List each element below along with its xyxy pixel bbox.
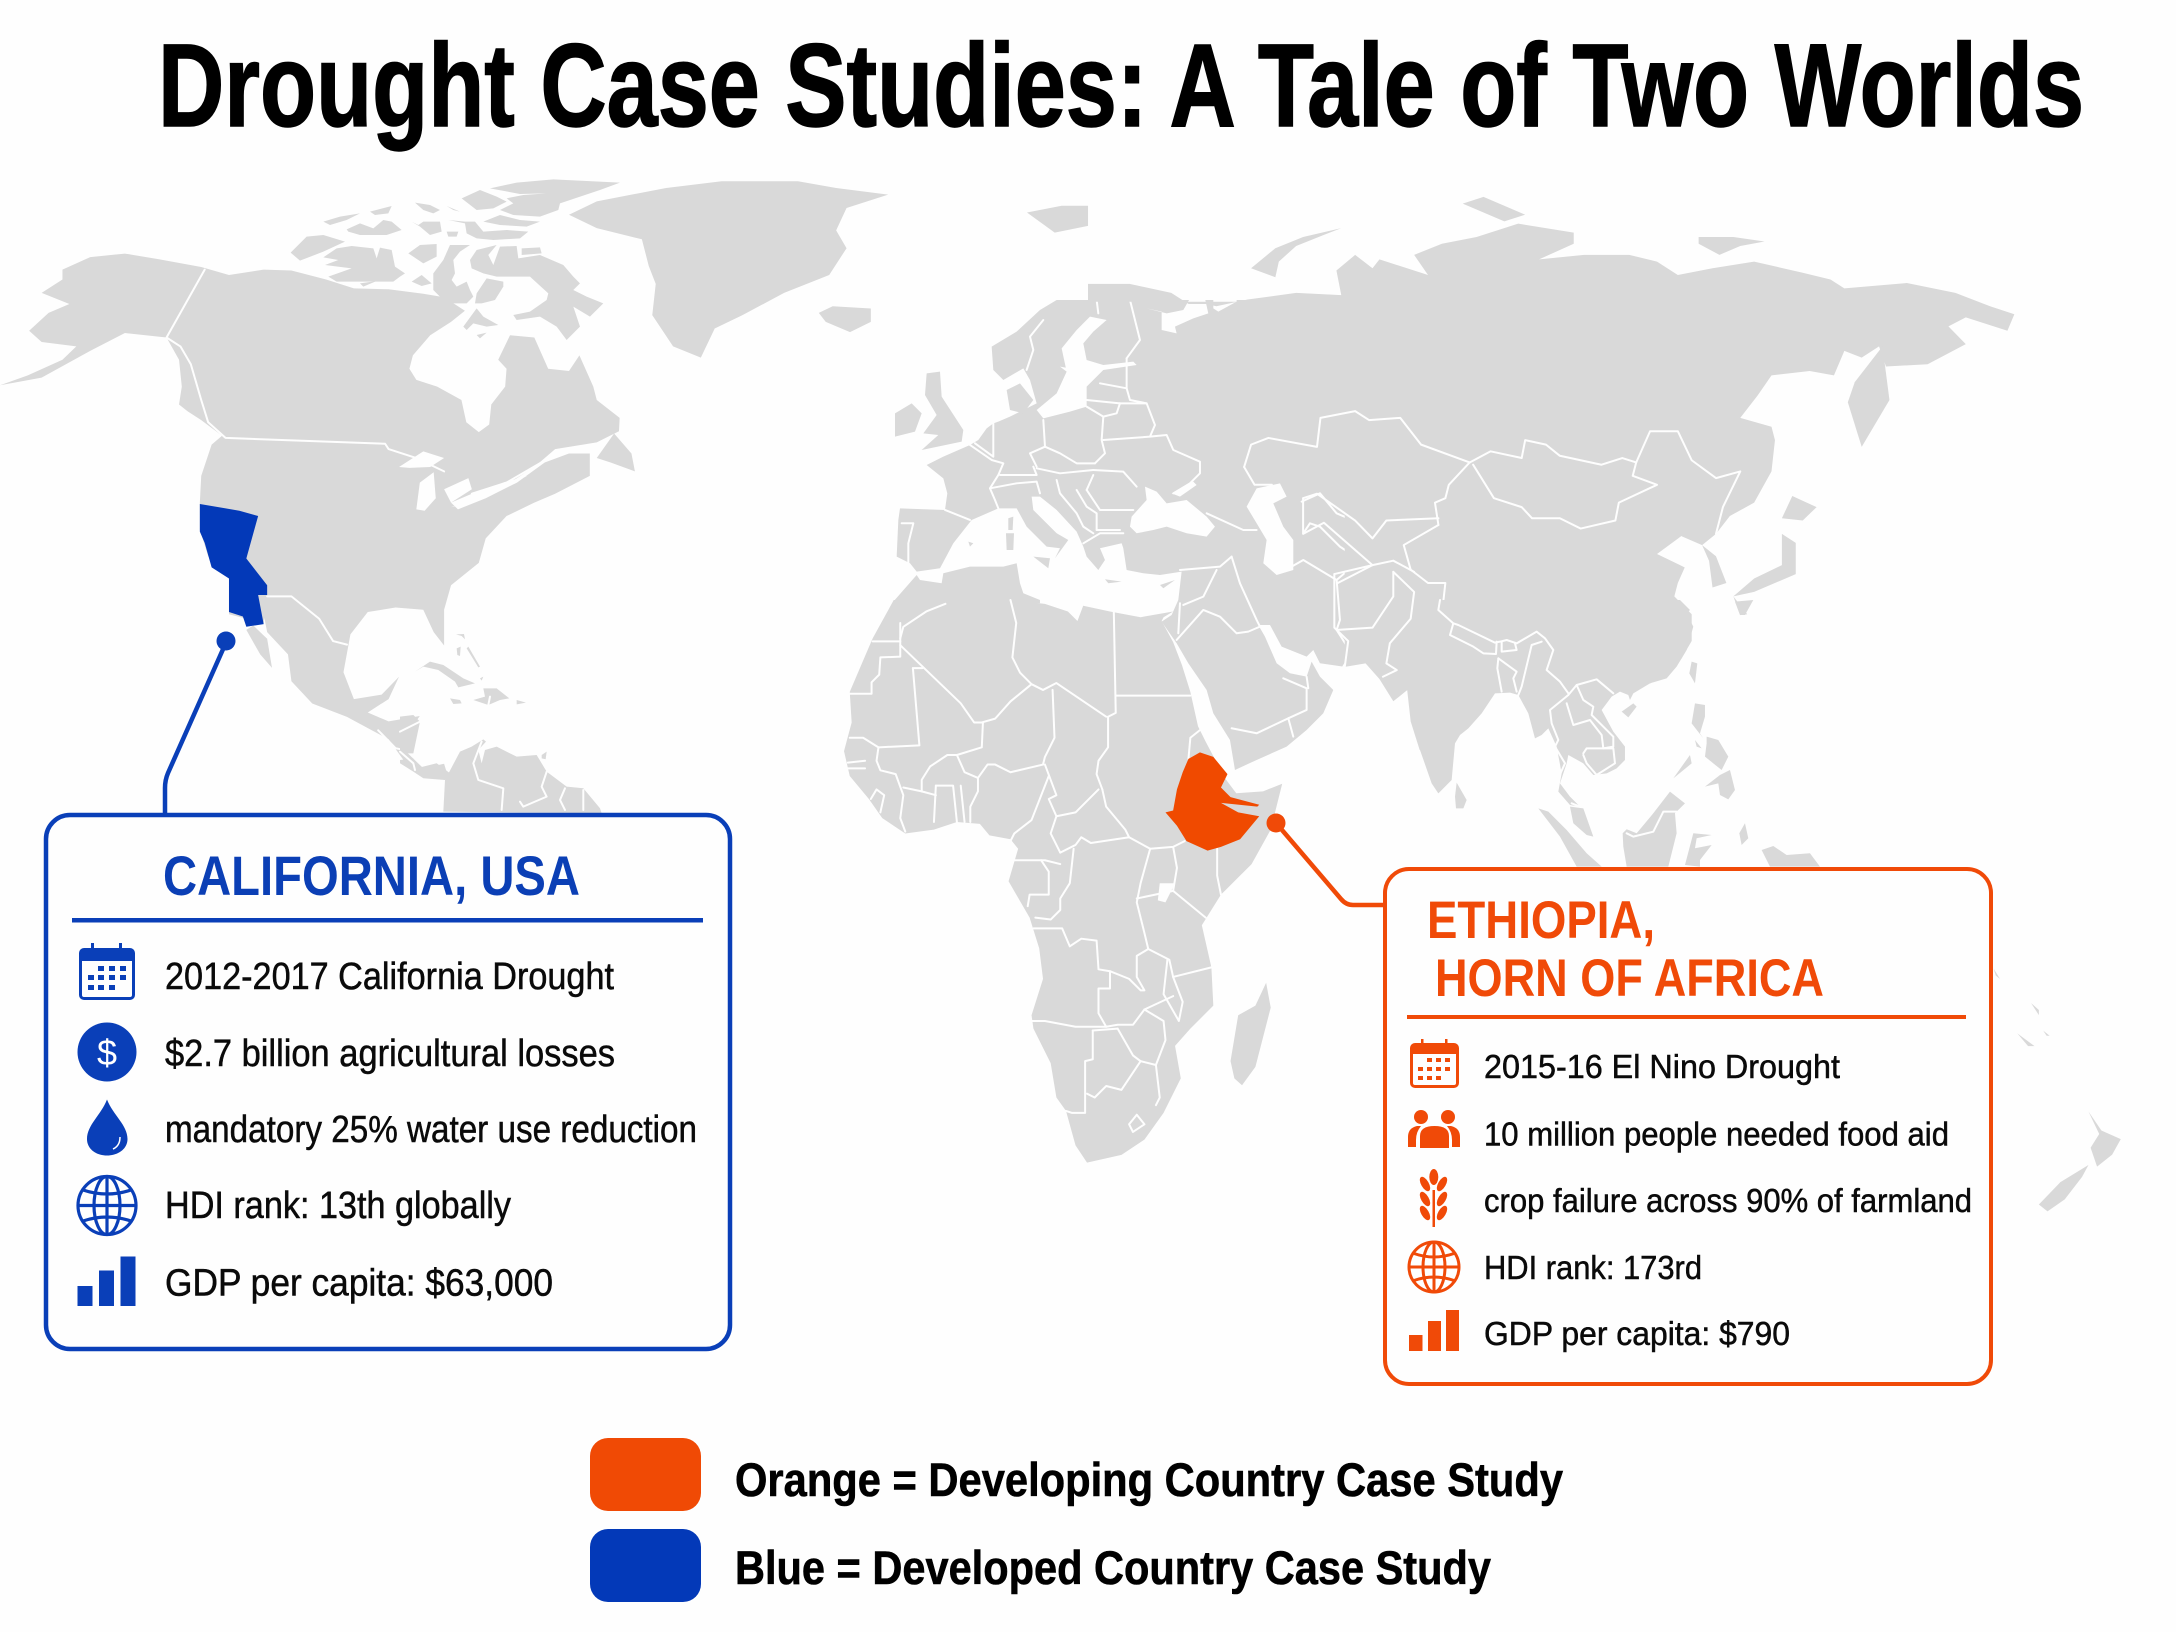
icon: globe [1409,1242,1459,1292]
California highlight [200,504,267,627]
icon: bars [1409,1310,1459,1351]
row text: date: 2015-16 El Nino Drought [1484,1048,1840,1085]
heading: Ethiopia line 1: ETHIOPIA, [1427,891,1655,950]
legend [590,1438,1563,1602]
row text: water use: mandatory 25% water use reduction [165,1109,697,1151]
icon: calendar [1410,1039,1459,1088]
icon: dollar [78,1022,136,1082]
panel: California [46,815,730,1349]
row text: people: 10 million people needed food aid [1484,1116,1949,1152]
icon: globe [78,1176,136,1234]
row text: HDI: HDI rank: 173rd [1484,1249,1702,1286]
world map [0,179,2121,1211]
icon: wheat [1418,1169,1449,1227]
icon: bars [78,1256,136,1306]
legend text: blue: Blue = Developed Country Case Study [735,1541,1491,1594]
row text: crops: crop failure across 90% of farmland [1484,1182,1972,1219]
row text: HDI: HDI rank: 13th globally [165,1185,511,1227]
connector: Ethiopia [1266,814,1386,905]
icon: people [1408,1110,1460,1148]
connector: California [165,632,236,816]
row text: GDP: GDP per capita: $790 [1484,1315,1790,1352]
legend swatch: blue [590,1529,701,1602]
heading: California: CALIFORNIA, USA [163,844,580,907]
icon: calendar [79,943,135,1000]
legend text: orange: Orange = Developing Country Case Study [735,1453,1563,1506]
row text: date: 2012-2017 California Drought [165,956,614,998]
heading: Ethiopia line 2: HORN OF AFRICA [1435,949,1824,1008]
row text: GDP: GDP per capita: $63,000 [165,1262,553,1304]
icon: dollar: $ [97,1032,117,1073]
row text: losses: $2.7 billion agricultural losses [165,1033,615,1075]
panel: Ethiopia [1385,869,1991,1384]
Ethiopia highlight [1165,752,1259,851]
icon: water drop [87,1100,128,1156]
